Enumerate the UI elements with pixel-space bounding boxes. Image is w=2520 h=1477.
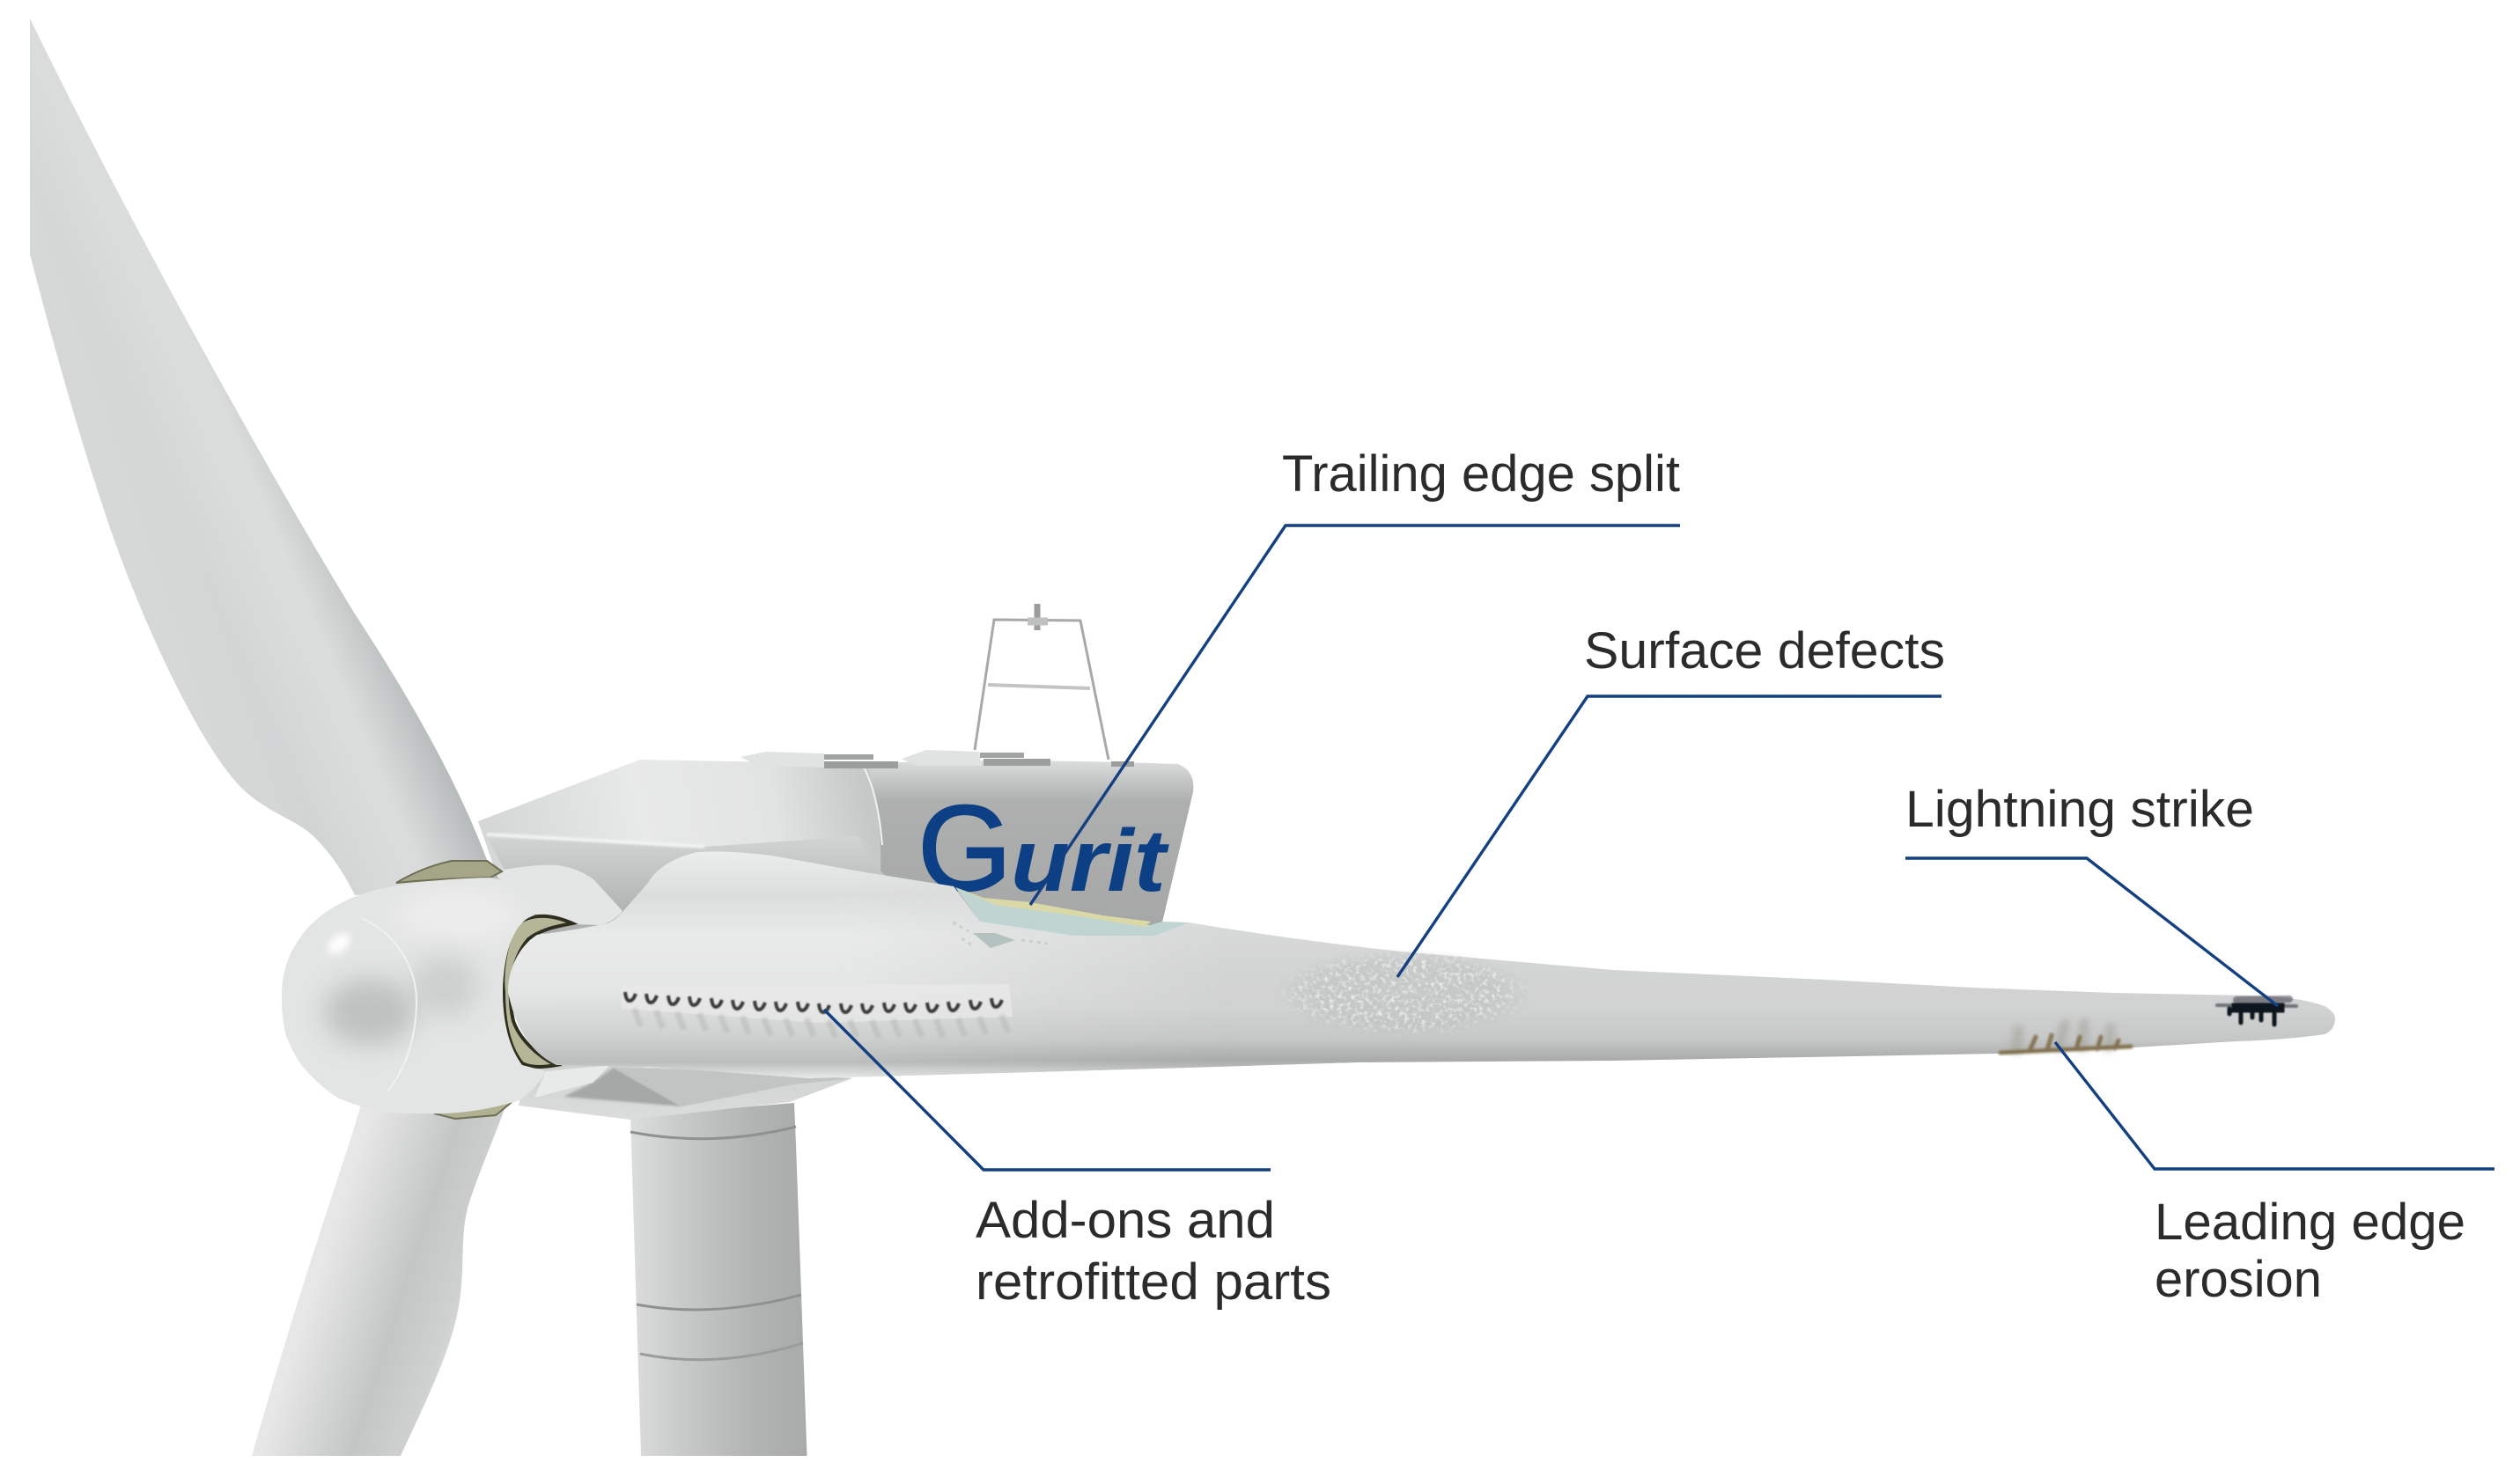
callout: leading edge erosion [2055, 1042, 2494, 1308]
surface defects damage [1290, 952, 1514, 1032]
roof hatches [741, 750, 1134, 768]
callout: add-ons and retrofitted parts: Add-ons and [976, 1192, 1275, 1249]
main blade [508, 852, 2335, 1078]
upper rotor blade [30, 18, 502, 895]
Gurit logo: G [917, 781, 1012, 916]
callout: add-ons and retrofitted parts [824, 1010, 1331, 1311]
hub [282, 878, 546, 1114]
nacelle underside [519, 1061, 852, 1120]
callout: trailing edge split [1030, 445, 1680, 905]
callout: trailing edge split: Trailing edge split [1282, 445, 1680, 503]
lower blade root ring [434, 1102, 511, 1119]
callout: add-ons and retrofitted parts: retrofitted parts [976, 1253, 1331, 1311]
callout: surface defects [1397, 622, 1945, 977]
Gurit logo [917, 781, 1169, 916]
leading edge erosion damage [2001, 1023, 2131, 1053]
callout: leading edge erosion: erosion [2155, 1251, 2322, 1308]
trailing edge split damage [953, 887, 1189, 948]
tower [630, 1103, 807, 1456]
callout: surface defects: Surface defects [1584, 622, 1945, 680]
bearing ring [503, 916, 572, 1067]
nacelle [478, 750, 1193, 968]
anemometer mast [975, 604, 1109, 760]
callout: lightning strike [1905, 781, 2278, 1006]
upper blade root ring [396, 861, 502, 883]
lightning strike damage [2217, 999, 2296, 1025]
Gurit logo: urit [1011, 812, 1169, 910]
callout: leading edge erosion: Leading edge [2155, 1194, 2465, 1251]
rear hub cowl [493, 865, 623, 925]
lower rotor blade [252, 1105, 506, 1456]
callout: lightning strike: Lightning strike [1905, 781, 2254, 838]
add-on vortex generators [622, 984, 1013, 1038]
